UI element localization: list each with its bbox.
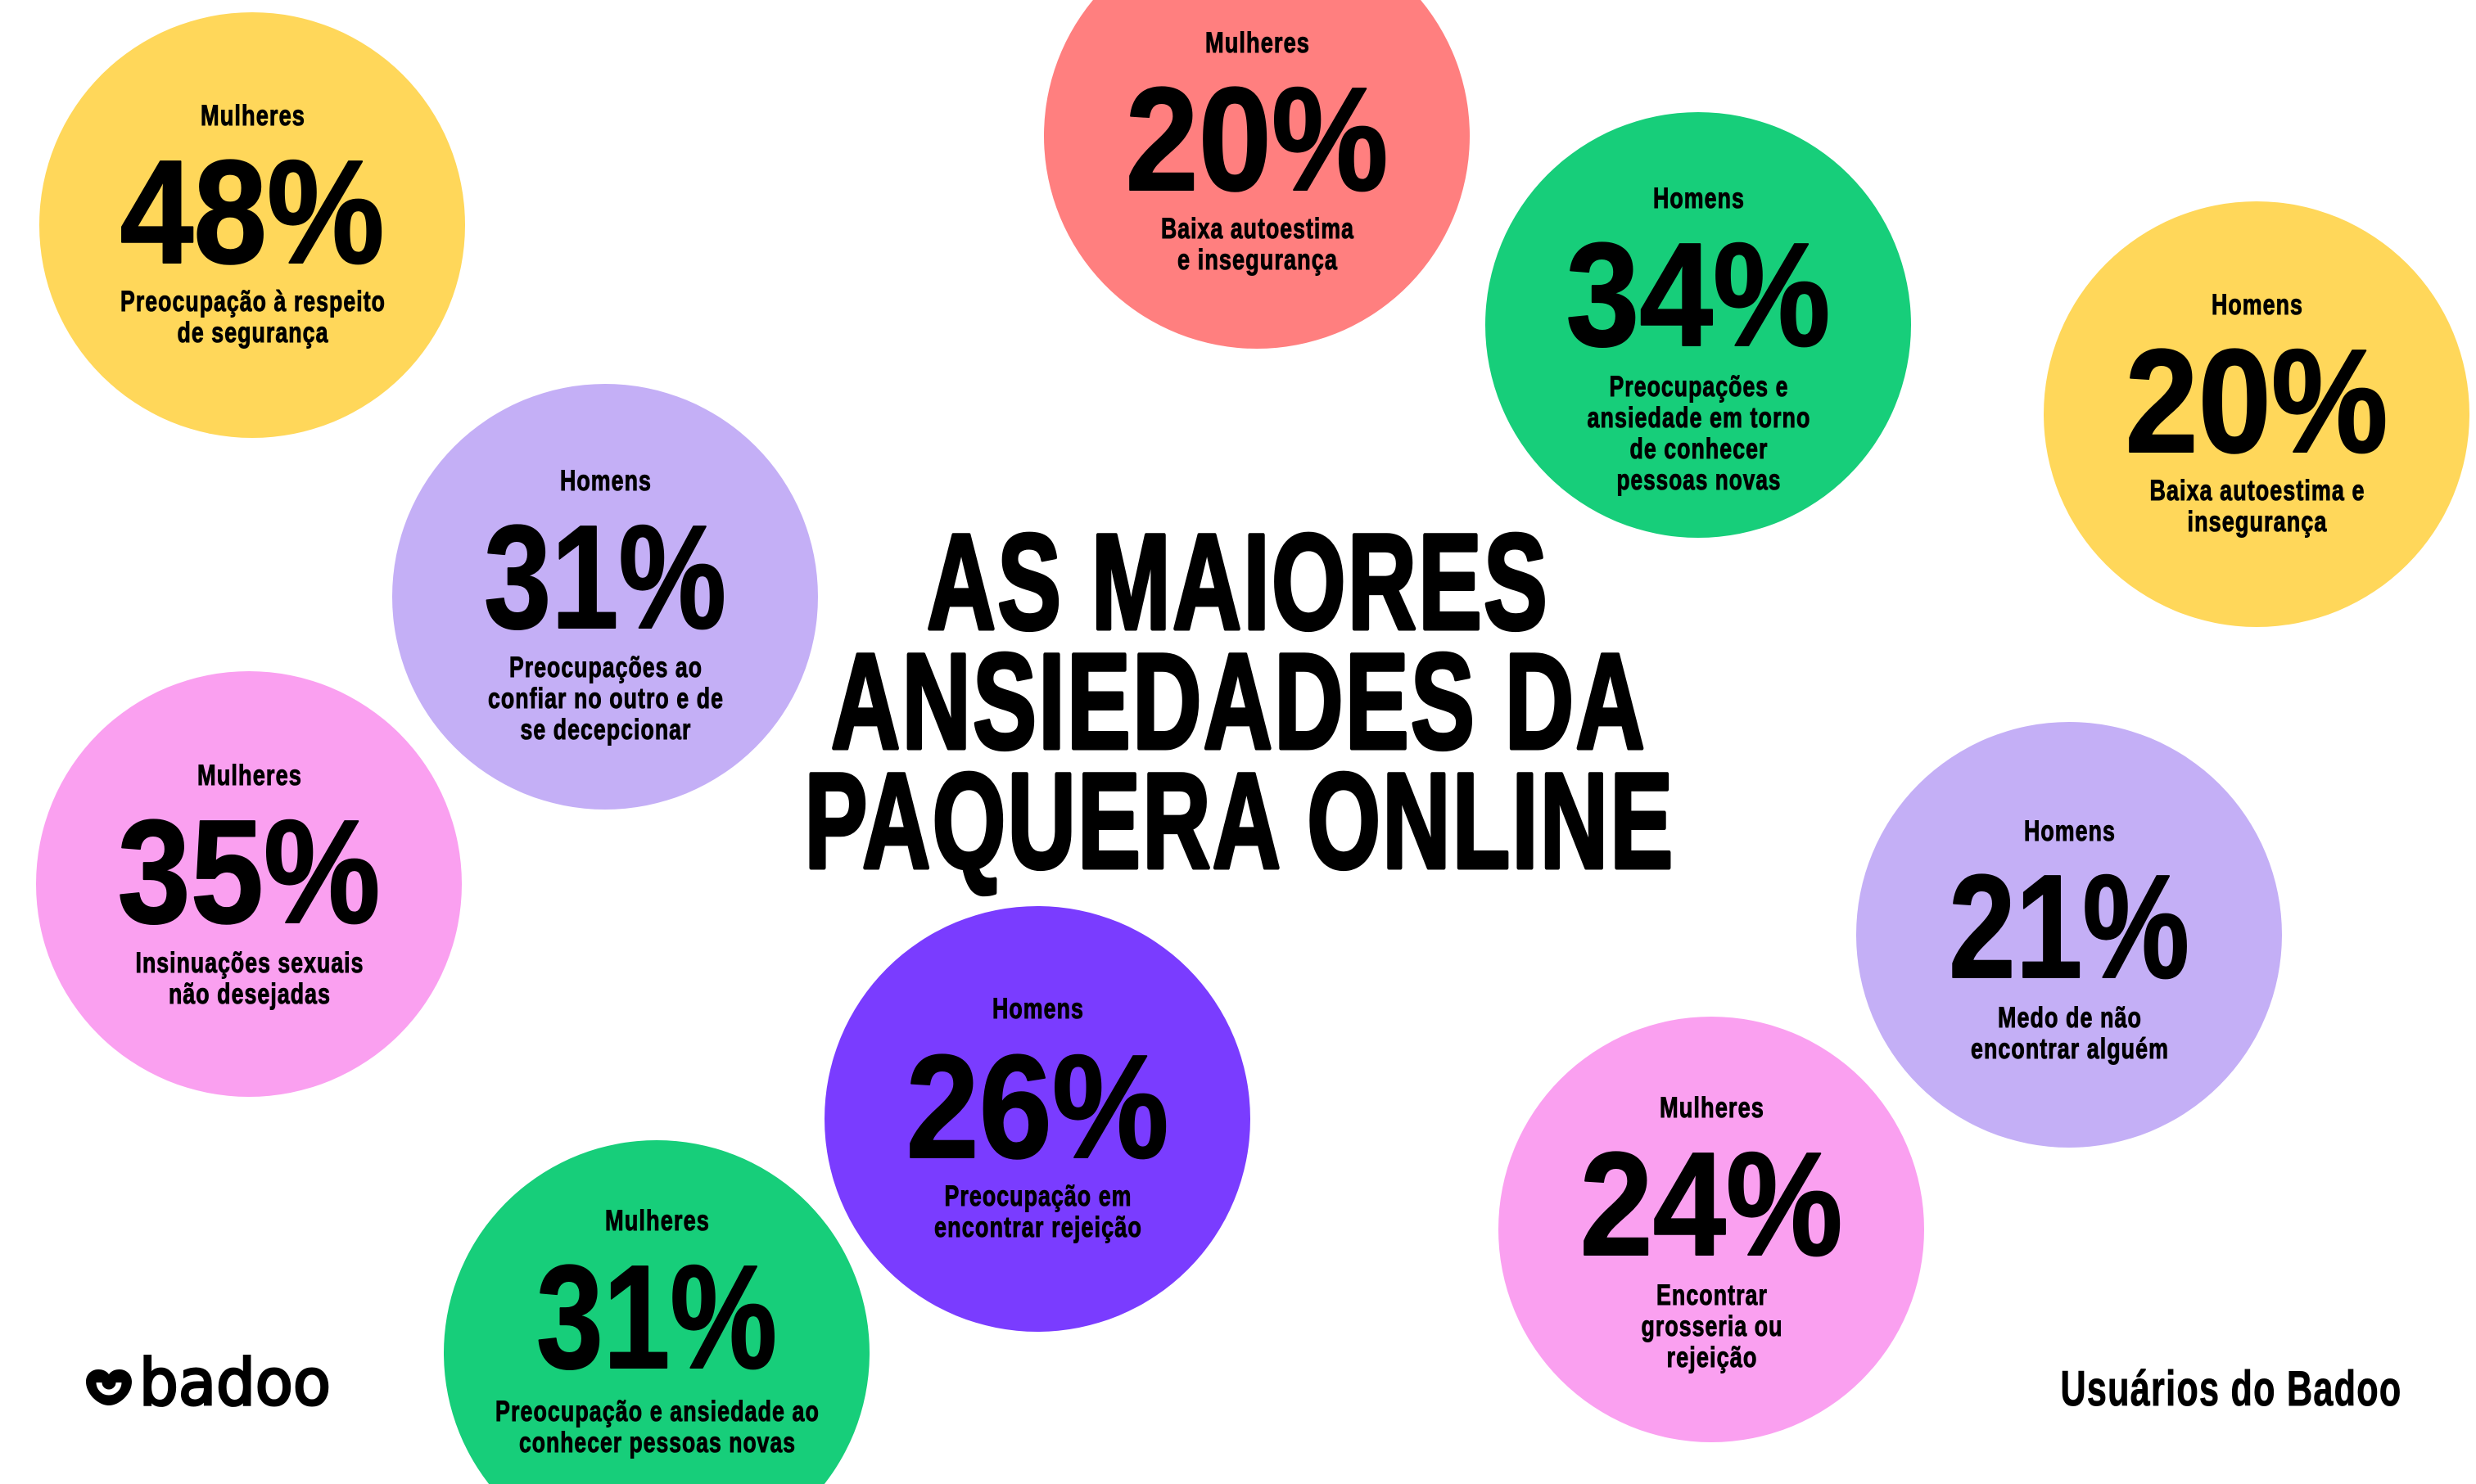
panel: Homens 31%	[392, 384, 818, 810]
label: Homens: Homens	[992, 993, 1084, 1025]
value: 21%: 21%	[1949, 845, 2189, 1009]
description	[136, 947, 364, 1010]
description: Insinuações sexuais	[136, 947, 364, 979]
title	[804, 507, 1675, 897]
description: insegurança	[2188, 506, 2327, 538]
description: e insegurança	[1177, 244, 1338, 276]
description: Encontrar	[1656, 1279, 1768, 1311]
description: encontrar alguém	[1971, 1033, 2169, 1065]
icon: heart smile	[86, 1369, 132, 1405]
logo: badoo	[86, 1346, 331, 1420]
title: AS MAIORES	[927, 507, 1549, 658]
description: grosseria ou	[1641, 1310, 1783, 1342]
description	[1641, 1279, 1783, 1373]
description: não desejadas	[169, 978, 331, 1010]
panel: Mulheres 24%	[1498, 1017, 1924, 1442]
panel: Homens 20%	[2044, 201, 2469, 627]
circle: green (cropped by bottom edge)	[444, 1140, 870, 1484]
description	[120, 286, 386, 349]
value: 24%: 24%	[1580, 1122, 1842, 1287]
panel: Mulheres 35%	[36, 671, 462, 1097]
description: rejeição	[1667, 1342, 1757, 1373]
panel: Mulheres 48%	[39, 12, 465, 438]
label: Homens: Homens	[1653, 183, 1745, 214]
description: Preocupações ao	[509, 652, 703, 683]
description	[1587, 371, 1811, 496]
panel: Homens 34%	[1485, 112, 1911, 538]
title: PAQUERA ONLINE	[804, 746, 1675, 897]
panel: Homens 21%	[1856, 722, 2282, 1148]
panel: Mulheres 31%	[444, 1140, 870, 1484]
label: Mulheres: Mulheres	[197, 760, 302, 792]
label: Mulheres: Mulheres	[605, 1205, 710, 1237]
circle: yellow	[2044, 201, 2469, 627]
circle: lilac	[1856, 722, 2282, 1148]
description: Preocupação à respeito	[120, 286, 386, 318]
description	[488, 652, 724, 746]
circle: coral (cropped by top edge)	[1044, 0, 1470, 349]
description: conhecer pessoas novas	[519, 1427, 796, 1459]
panel: Homens 26%	[825, 906, 1250, 1332]
label: Homens: Homens	[2212, 289, 2303, 321]
value: 26%: 26%	[906, 1025, 1169, 1189]
value: 35%: 35%	[118, 790, 380, 954]
value: 31%: 31%	[536, 1235, 777, 1400]
description: Preocupação em	[945, 1180, 1132, 1212]
description: Preocupações e	[1610, 371, 1788, 403]
circle: purple	[825, 906, 1250, 1332]
description	[495, 1396, 820, 1459]
value: 34%: 34%	[1566, 213, 1831, 377]
circle: pink	[1498, 1017, 1924, 1442]
label: Mulheres: Mulheres	[1660, 1092, 1764, 1124]
label: Homens: Homens	[560, 465, 652, 497]
description: pessoas novas	[1616, 464, 1782, 496]
description: Baixa autoestima	[1161, 213, 1354, 245]
circle: green	[1485, 112, 1911, 538]
value: 48%: 48%	[120, 130, 385, 295]
description: Baixa autoestima e	[2150, 475, 2365, 507]
circle: yellow	[39, 12, 465, 438]
description: Medo de não	[1998, 1002, 2142, 1034]
description: encontrar rejeição	[934, 1211, 1142, 1243]
label: Homens: Homens	[2024, 815, 2116, 847]
circle: lilac	[392, 384, 818, 810]
description	[1161, 213, 1354, 276]
description: Preocupação e ansiedade ao	[495, 1396, 820, 1428]
description	[1971, 1002, 2169, 1065]
label: Mulheres: Mulheres	[201, 100, 305, 132]
description: se decepcionar	[521, 714, 691, 746]
title: ANSIEDADES DA	[831, 626, 1647, 778]
value: 20%: 20%	[2126, 319, 2388, 484]
description: confiar no outro e de	[488, 683, 724, 715]
description: ansiedade em torno	[1587, 402, 1811, 434]
circle: pink	[36, 671, 462, 1097]
description	[934, 1180, 1142, 1243]
value: 31%: 31%	[484, 495, 726, 660]
description: de segurança	[177, 317, 329, 349]
value: 20%: 20%	[1125, 57, 1389, 222]
wordmark: badoo	[139, 1346, 331, 1420]
description: de conhecer	[1629, 433, 1769, 465]
description	[2150, 475, 2365, 538]
label: Mulheres: Mulheres	[1205, 27, 1310, 59]
panel: Mulheres 20%	[1044, 0, 1470, 349]
